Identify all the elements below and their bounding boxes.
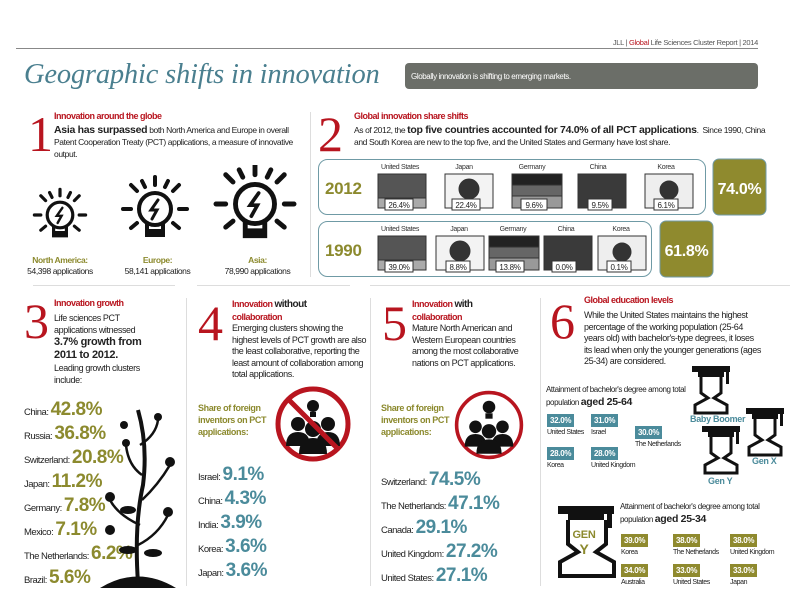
share label 4: applications: [198,427,248,437]
label Europe: Europe: [143,255,172,265]
stats 25-64: 28.0% [594,449,615,458]
heading 5 [412,299,472,322]
label Asia [225,255,290,276]
stats 25-64: Israel [591,429,606,436]
icon: tree [100,410,176,588]
flags chart: Korea [657,164,675,171]
flags chart: Korea [612,226,630,233]
growth list: Russia: 36.8% [24,423,106,444]
share label 5: inventors on PCT [381,415,449,425]
flags chart: 6.1% [657,201,675,210]
flags chart: 2012 [325,179,362,198]
flags chart: 9.5% [591,201,609,210]
panel 5 [381,295,524,586]
growth list: Germany: 7.8% [24,495,105,516]
stats 25-34 [621,534,774,586]
title: Geographic shifts in innovation [24,59,380,90]
list 5: United States: 27.1% [381,565,487,586]
flags chart: 0.0% [555,263,573,272]
panel 4 [198,295,366,581]
flags chart: 1990 [325,241,362,260]
text 6: While the United States maintains the highest percentage of the working population (25-64 years old) with bachelor's-type degrees, it loses its lead when only the younger generations (ages 25-34) are considered. [584,310,761,366]
stats 25-64: 30.0% [638,428,659,437]
heading 5: collaboration [412,312,462,322]
text 2: As of 2012, the top five countries accounted for 74.0% of all PCT applications. Since 1990, China and South Korea are new to the top five, and the United States and Germany have lost share. [354,124,765,147]
stats 25-64: 31.0% [594,416,615,425]
list 5: United Kingdom: 27.2% [381,541,497,562]
number 6: 6 [550,293,575,349]
label Europe [125,255,190,276]
icon: generations: Gen X [752,456,777,466]
flags chart: China [590,164,607,171]
flags chart: Germany [500,226,527,233]
text 1: Asia has surpassed both North America and Europe in overall Patent Cooperation Treaty (PCT) applications, a measure of innovative output. [54,124,293,159]
heading 3: Innovation growth [54,298,124,308]
flags chart: United States [381,164,420,171]
flags chart: 0.1% [610,263,628,272]
flags chart: Japan [450,226,468,233]
stats 25-34: 38.0% [733,536,754,545]
flags chart: 9.6% [525,201,543,210]
list 4 [198,464,267,581]
stats 25-34: 33.0% [676,566,697,575]
icon: Gen Y: GEN [573,529,596,541]
list 4: Israel: 9.1% [198,464,264,485]
text 5: Mature North American and Western European countries among the most collaborative nations on PCT applications. [412,323,518,368]
share label 4: Share of foreign [198,403,261,413]
stats 25-34: 38.0% [676,536,697,545]
flags chart: China [558,226,575,233]
panel 3 [24,293,142,588]
stats 25-64: United Kingdom [591,462,635,469]
share label 5 [381,403,450,437]
flags chart: 26.4% [388,201,410,210]
list 4: India: 3.9% [198,512,262,533]
stats 25-34: United Kingdom [730,549,774,556]
flags chart: Germany [519,164,546,171]
growth list [24,399,132,588]
list 4: China: 4.3% [198,488,266,509]
list 4: Japan: 3.6% [198,560,267,581]
flags chart [318,158,766,278]
growth list: Japan: 11.2% [24,471,102,492]
number 2: 2 [318,106,343,162]
label Asia: 78,990 applications [225,266,290,276]
bulbs [32,165,296,238]
flags chart: 8.8% [449,263,467,272]
text 3: Life sciences PCT applications witnessed 3.7% growth from 2011 to 2012. Leading growth clusters include: [54,313,142,385]
heading 4: Innovation without [232,299,307,310]
number 5: 5 [382,295,407,351]
panel 6 [546,293,784,586]
icon: no collaboration [276,386,350,462]
list 5: Switzerland: 74.5% [381,469,480,490]
flags chart: 74.0% [718,181,762,198]
stats 25-64: The Netherlands [635,441,681,448]
subheading 25-34: Attainment of bachelor's degree among total population aged 25-34 [620,502,760,525]
growth list: China: 42.8% [24,399,102,420]
share label 5: Share of foreign [381,403,444,413]
icon: Gen Y: Y [579,541,589,557]
flags chart: 22.4% [455,201,477,210]
flags chart: 13.8% [499,263,521,272]
list 5 [381,469,500,586]
icon: collaboration [454,390,524,460]
label NA [27,255,93,276]
heading 4: collaboration [232,312,282,322]
list 5: The Netherlands: 47.1% [381,493,499,514]
text 4: Emerging clusters showing the highest levels of PCT growth are also the least collaborative, reporting the least amount of collaboration among total applications. [232,323,366,379]
share label 4: inventors on PCT [198,415,266,425]
icon: generations [690,366,784,485]
stats 25-64: United States [547,429,584,436]
panel 1 [27,106,296,276]
stats 25-34: 39.0% [624,536,645,545]
heading 4 [232,299,307,322]
flags chart: Japan [455,164,473,171]
stats 25-34: Korea [621,549,638,556]
header tag: JLL | Global Life Sciences Cluster Report | 2014 [613,38,758,47]
heading 2: Global innovation share shifts [354,111,468,121]
growth list: The Netherlands: 6.2% [24,543,132,564]
icon: generations: Baby Boomer [690,414,746,424]
list 4: Korea: 3.6% [198,536,266,557]
share label 5: applications: [381,427,431,437]
subheading 25-64: Attainment of bachelor's degree among total population aged 25-64 [546,385,686,408]
icon: Gen Y [558,506,616,578]
flags chart: 61.8% [665,243,709,260]
stats 25-34: United States [673,579,710,586]
flags chart: United States [381,226,420,233]
growth list: Switzerland: 20.8% [24,447,123,468]
growth list: Mexico: 7.1% [24,519,97,540]
panel 2 [318,106,766,278]
share label 4 [198,403,266,437]
label Europe: 58,141 applications [125,266,190,276]
flags chart: 39.0% [388,263,410,272]
stats 25-64: Korea [547,462,564,469]
growth list: Brazil: 5.6% [24,567,90,588]
stats 25-34: The Netherlands [673,549,719,556]
label NA: North America: [32,255,88,265]
heading 5: Innovation with [412,299,472,310]
heading 1: Innovation around the globe [54,111,162,121]
label NA: 54,398 applications [27,266,93,276]
list 5: Canada: 29.1% [381,517,467,538]
number 1: 1 [28,106,53,162]
stats 25-64 [547,414,681,469]
subtitle box [405,63,758,89]
subtitle box: Globally innovation is shifting to emerging markets. [411,72,571,81]
stats 25-34: Japan [730,579,747,586]
label Asia: Asia: [248,255,267,265]
stats 25-34: Australia [621,579,645,586]
number 4: 4 [198,295,223,351]
stats 25-34: 33.0% [733,566,754,575]
stats 25-64: 28.0% [550,449,571,458]
stats 25-64: 32.0% [550,416,571,425]
stats 25-34: 34.0% [624,566,645,575]
number 3: 3 [24,293,49,349]
heading 6: Global education levels [584,295,673,305]
